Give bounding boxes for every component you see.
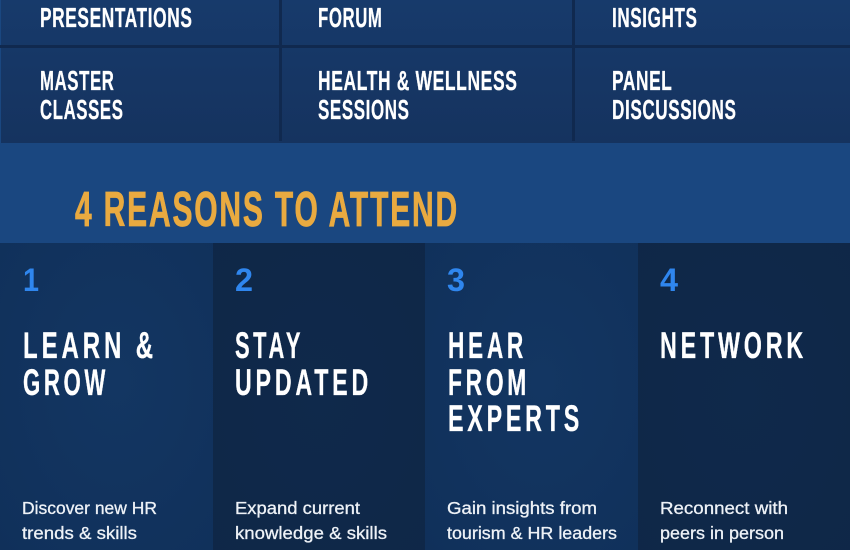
reason title: UPDATED [235,362,372,403]
reason description [235,498,387,543]
reason description: Discover new HR [22,498,157,518]
panel: reason 1 learn and grow [0,243,213,550]
grid item: master classes: CLASSES [40,94,124,125]
panel: reason 2 stay updated [213,243,425,550]
reason description: peers in person [660,523,784,543]
reason title: HEAR [448,325,527,366]
reason description: tourism & HR leaders [447,523,617,543]
reason title [23,325,157,403]
grid item: panel discussions: PANEL [612,65,672,96]
reason title: STAY [235,325,304,366]
grid item: health and wellness sessions [318,65,518,125]
reason description: Reconnect with [660,498,788,518]
reason title [448,325,583,439]
grid item: master classes: MASTER [40,65,114,96]
panel: reason 4 network [638,243,850,550]
reason title: FROM [448,362,530,403]
grid item: health and wellness sessions: SESSIONS [318,94,410,125]
grid item: insights: INSIGHTS [612,2,698,33]
reason title [235,325,372,403]
reason title: EXPERTS [448,398,583,439]
reason description [22,498,157,543]
number 3: 3 [447,262,465,298]
number 2: 2 [235,262,253,298]
heading: 4 reasons to attend: 4 REASONS TO ATTEND [75,183,459,237]
grid item: presentations: PRESENTATIONS [40,2,192,33]
panel: session formats grid [0,0,850,143]
number 1: 1 [23,262,39,298]
grid item: panel discussions: DISCUSSIONS [612,94,736,125]
grid item: health and wellness sessions: HEALTH & WELLNESS [318,65,518,96]
reason description [660,498,788,543]
grid item: forum: FORUM [318,2,382,33]
panel: reason 3 hear from experts [425,243,638,550]
reason description: Gain insights from [447,498,597,518]
number 4: 4 [660,262,678,298]
grid item: master classes [40,65,124,125]
grid item: panel discussions [612,65,736,125]
reason description: trends & skills [22,523,137,543]
reason description: Expand current [235,498,360,518]
reason title: LEARN & [23,325,157,366]
reason title: GROW [23,362,109,403]
reason description [447,498,617,543]
reason description: knowledge & skills [235,523,387,543]
